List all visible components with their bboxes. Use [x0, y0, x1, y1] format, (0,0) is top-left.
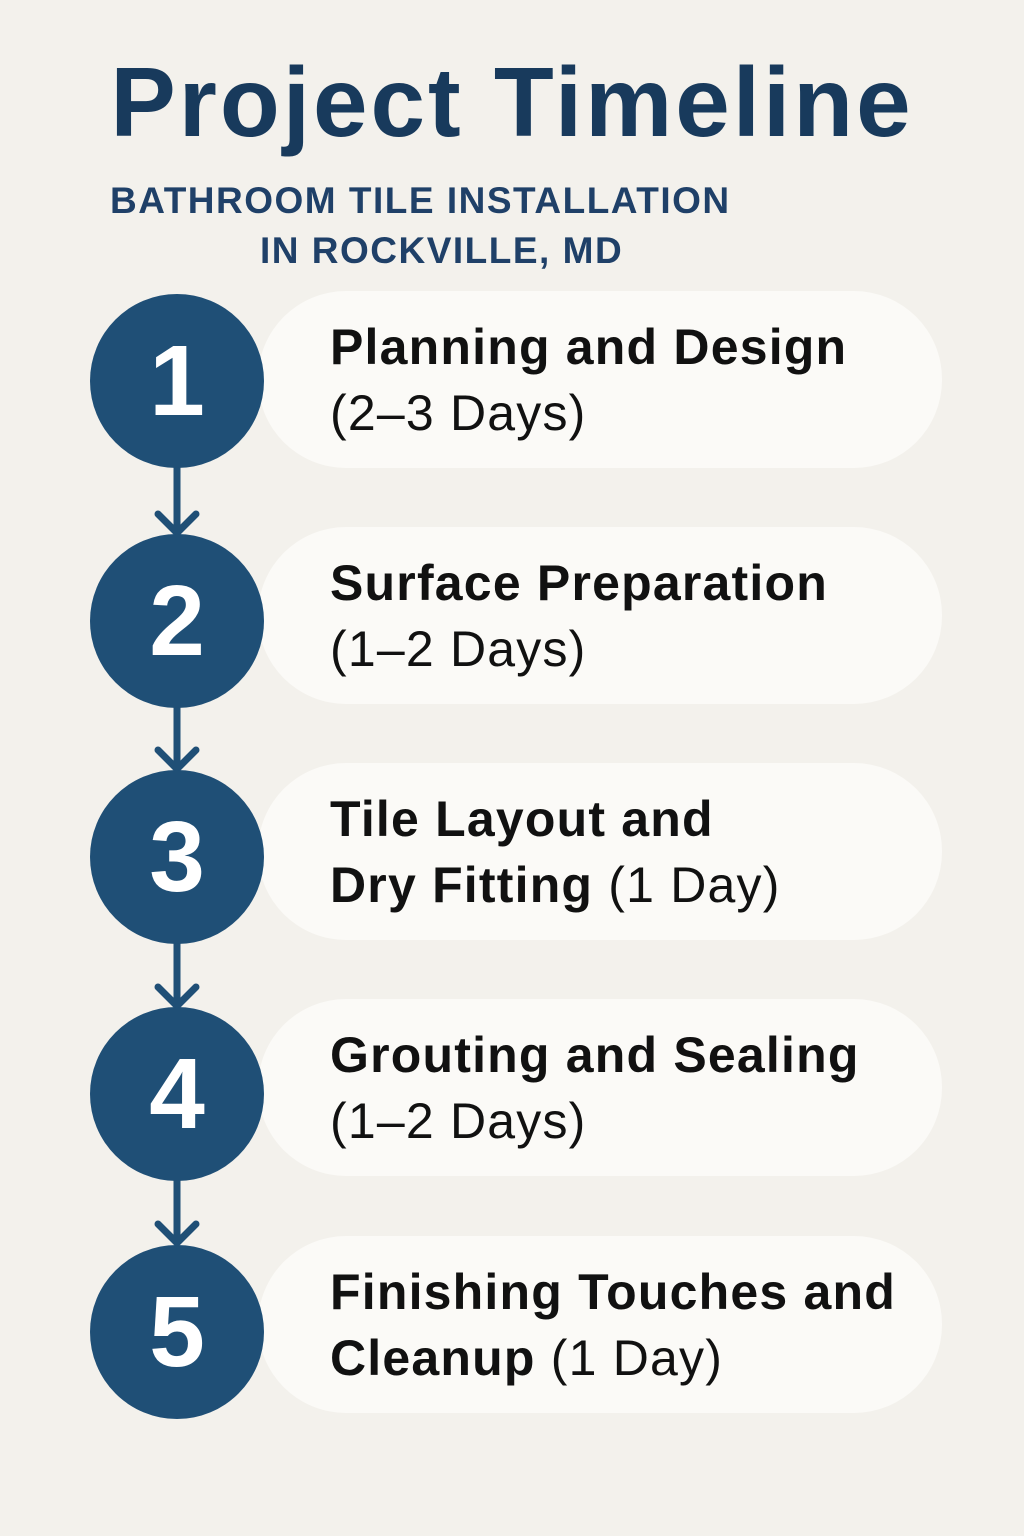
card 3	[258, 763, 942, 940]
title: Project Timeline	[110, 47, 914, 157]
step 5 circle: 5	[149, 1276, 205, 1388]
card 1: Planning and Design	[330, 319, 847, 375]
step 1 circle: 1	[149, 325, 205, 437]
subtitle: BATHROOM TILE INSTALLATION	[110, 180, 731, 221]
step 2 circle: 2	[149, 565, 205, 677]
step 4 circle	[90, 1007, 264, 1181]
card 2: (1–2 Days)	[330, 621, 587, 677]
step 1 circle	[90, 294, 264, 468]
card 1	[258, 291, 942, 468]
card 4	[258, 999, 942, 1176]
card 3: Tile Layout and	[330, 791, 714, 847]
card 2: Surface Preparation	[330, 555, 828, 611]
card 5: Cleanup (1 Day)	[330, 1330, 723, 1386]
card 5	[258, 1236, 942, 1413]
card 2	[258, 527, 942, 704]
subtitle	[110, 180, 731, 271]
step 2 circle	[90, 534, 264, 708]
subtitle: IN ROCKVILLE, MD	[260, 230, 623, 271]
step 5 circle	[90, 1245, 264, 1419]
step 4 circle: 4	[149, 1038, 205, 1150]
step 3 circle	[90, 770, 264, 944]
card 1: (2–3 Days)	[330, 385, 587, 441]
step 3 circle: 3	[149, 801, 205, 913]
card 4: Grouting and Sealing	[330, 1027, 860, 1083]
card 5: Finishing Touches and	[330, 1264, 896, 1320]
card 4: (1–2 Days)	[330, 1093, 587, 1149]
card 3: Dry Fitting (1 Day)	[330, 857, 781, 913]
